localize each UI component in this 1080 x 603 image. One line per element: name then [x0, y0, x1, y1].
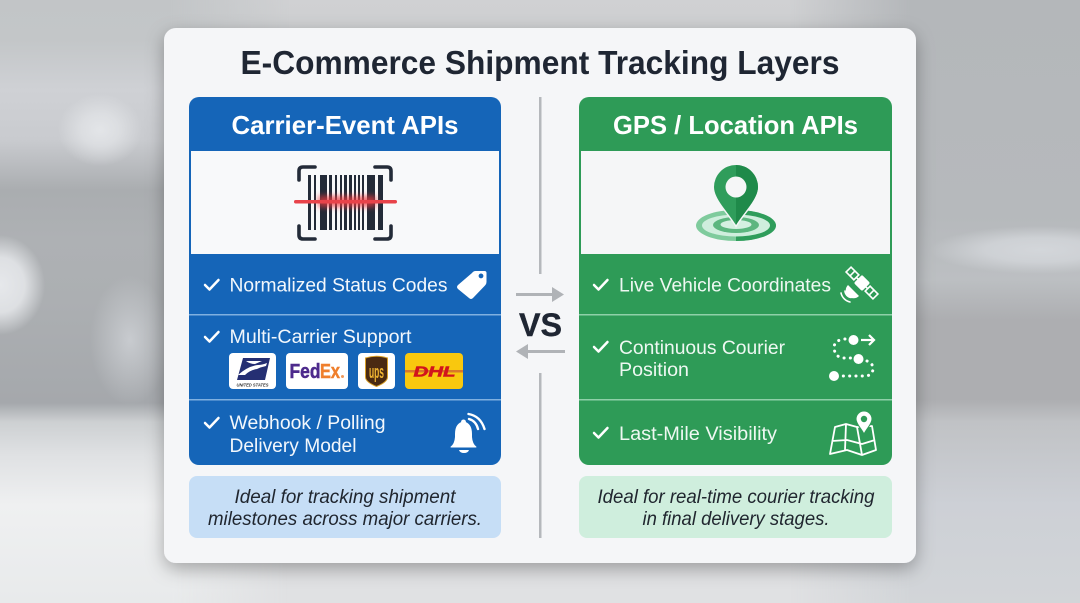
image area: location	[581, 151, 890, 254]
logo: DHL	[405, 353, 463, 389]
caption: gps: in final delivery stages.	[642, 509, 830, 530]
row 1: Live Vehicle Coordinates: Live Vehicle Coordinates	[619, 276, 831, 296]
logo: FedEx: Fed	[290, 361, 320, 383]
VS label: VS	[519, 307, 562, 343]
arrow: left	[516, 344, 565, 359]
logo: UPS	[358, 353, 395, 389]
row 3: Last-Mile Visibility	[594, 411, 876, 455]
panel: Carrier-Event APIs	[189, 97, 501, 465]
heading: Carrier-Event APIs: Carrier-Event APIs	[232, 110, 458, 140]
logo: FedEx	[286, 353, 348, 389]
row 3: Webhook / Polling Delivery Model: Delivery Model	[230, 436, 356, 457]
row 3: Webhook / Polling Delivery Model	[205, 413, 484, 457]
logo: USPS	[229, 353, 276, 389]
row 2: Continuous Courier Position: Position	[619, 360, 689, 381]
icon: price tag	[457, 271, 486, 299]
title: E-Commerce Shipment Tracking Layers	[240, 44, 840, 81]
row 3: Last-Mile Visibility: Last-Mile Visibility	[619, 424, 778, 445]
caption: carrier-event	[189, 476, 501, 538]
icon: bell	[451, 414, 484, 453]
logo: DHL: DHL	[414, 364, 456, 380]
arrow: right	[516, 287, 564, 302]
row 2: Continuous Courier Position: Continuous Courier	[619, 338, 786, 359]
caption: carrier-event: Ideal for tracking shipment	[234, 487, 456, 508]
icon: barcode scanner	[294, 167, 397, 239]
image area: barcode	[191, 151, 499, 254]
caption: gps	[579, 476, 892, 538]
heading: GPS / Location APIs: GPS / Location APIs	[613, 110, 858, 140]
icon: location pin	[696, 165, 776, 241]
main card	[164, 28, 916, 563]
logo: USPS: UNITED STATES	[236, 382, 268, 388]
icon: satellite	[841, 266, 879, 302]
row 1: Normalized Status Codes: Normalized Status Codes	[230, 276, 448, 296]
icon: route	[829, 335, 874, 381]
row 1: Normalized Status Codes	[205, 271, 486, 299]
divider and VS	[516, 97, 565, 538]
row 2: Multi-Carrier Support: Multi-Carrier Support	[230, 327, 412, 348]
caption: carrier-event: milestones across major carriers.	[208, 509, 482, 530]
logo: FedEx: Ex	[320, 361, 340, 383]
panel: GPS / Location APIs	[579, 97, 892, 465]
row 2: Multi-Carrier Support	[205, 327, 463, 389]
row 3: Webhook / Polling Delivery Model: Webhook / Polling	[230, 413, 386, 434]
row 1: Live Vehicle Coordinates	[594, 266, 879, 302]
logo: UPS: ups	[369, 362, 384, 382]
caption: gps: Ideal for real-time courier tracking	[598, 487, 875, 508]
row 2: Continuous Courier Position	[594, 335, 874, 381]
icon: map with pin	[830, 411, 876, 455]
